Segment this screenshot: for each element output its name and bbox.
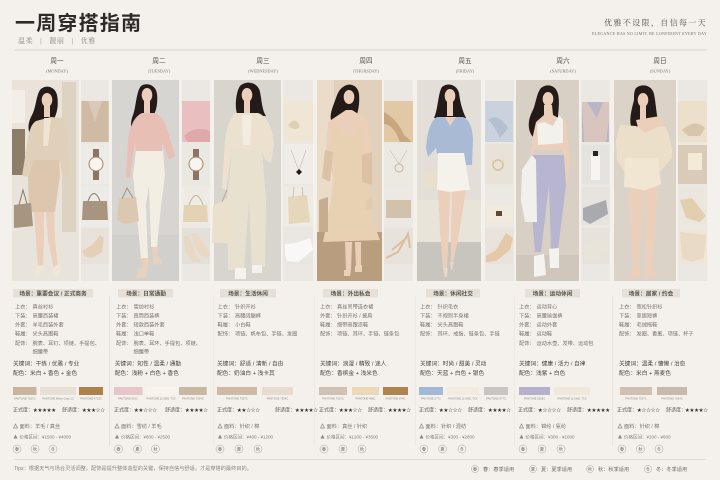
- ratings: 正式度：: [617, 406, 637, 414]
- season badges: [13, 445, 57, 453]
- outfit list: 外套：: [15, 320, 31, 328]
- outfit list: 真丝吊带连衣裙: [337, 302, 373, 310]
- weekday heading: [650, 57, 671, 74]
- outfit list: 配饰：: [218, 330, 233, 338]
- colour swatches: PANTONE 7534C: [182, 396, 204, 400]
- model photo: [212, 80, 281, 281]
- season badges: 秋: [256, 446, 261, 453]
- outfit list: 鞋履：: [420, 320, 436, 328]
- ratings: 舒适度：: [368, 406, 388, 414]
- outfit list: 真丝衬衫: [32, 302, 53, 310]
- season badges: 春: [15, 446, 20, 453]
- model photo: [317, 80, 382, 281]
- colour swatches: PANTONE 7534C: [267, 396, 288, 400]
- outfit list: 外套：: [320, 312, 336, 320]
- weekday heading: (WEDNESDAY): [248, 68, 278, 74]
- weekday heading: 周五: [458, 57, 472, 65]
- keywords and colour scheme: [13, 360, 80, 377]
- outfit list: 下装：: [116, 312, 132, 320]
- outfit list: 外套：: [519, 320, 535, 328]
- outfit list: [420, 302, 501, 338]
- fabric and price: 价格区间：¥400 - ¥1200: [224, 434, 274, 440]
- keywords and colour scheme: 关键词：舒适 / 清新 / 自由: [217, 360, 284, 368]
- ratings: ★★☆☆☆: [439, 406, 462, 414]
- model photo: [12, 80, 79, 281]
- colour swatches: PANTONE 7527C: [625, 396, 647, 400]
- colour swatches: PANTONE 877C: [486, 396, 506, 400]
- outfit list: 细带高跟凉鞋: [337, 320, 368, 328]
- ratings: ★☆☆☆☆: [538, 406, 561, 414]
- keywords and colour scheme: 配色：天蓝 + 白色 + 银色: [420, 369, 484, 377]
- outfit list: 下装：: [15, 312, 31, 320]
- outfit list: 上衣：: [420, 302, 436, 310]
- outfit list: 鞋履：: [320, 320, 336, 328]
- outfit list: 短款西装外套: [134, 320, 165, 328]
- colour swatches: [13, 387, 103, 400]
- ratings: [319, 406, 411, 414]
- season legend: 冬: [646, 466, 650, 473]
- weekday heading: 周二: [152, 57, 166, 65]
- season legend: 秋: [588, 466, 593, 473]
- fabric and price: 价格区间：¥300 - ¥1000: [526, 434, 575, 440]
- outfit list: 小白鞋: [235, 320, 251, 328]
- keywords and colour scheme: [115, 360, 181, 377]
- outfit list: 家居短裤: [636, 312, 657, 320]
- colour swatches: [114, 387, 207, 400]
- season badges: [320, 445, 366, 453]
- outfit list: 浅口单鞋: [134, 330, 154, 338]
- outfit list: 上衣：: [218, 302, 233, 310]
- season legend: [471, 465, 687, 473]
- outfit list: [619, 302, 694, 338]
- outfit list: 上衣：: [15, 302, 31, 310]
- panel: Monday: [12, 57, 109, 453]
- colour swatches: PANTONE 4715C: [80, 396, 102, 400]
- outfit list: 下装：: [619, 312, 635, 320]
- outfit list: 下装：: [218, 312, 233, 320]
- season badges: 冬: [51, 446, 55, 453]
- outfit list: 腕表、耳钉、项链、手提包、: [32, 339, 100, 347]
- outfit list: 配饰：: [15, 339, 31, 347]
- outfit list: 下装：: [420, 312, 436, 320]
- colour swatches: [620, 387, 687, 400]
- weekday heading: [148, 57, 171, 74]
- colour swatches: PANTONE 691C: [118, 396, 138, 400]
- weekday heading: (TUESDAY): [148, 68, 171, 74]
- outfit list: 鞋履：: [116, 330, 132, 338]
- scene tag: 场景：居家 / 约会: [629, 290, 674, 298]
- panel: Sunday: [614, 57, 708, 453]
- season badges: 夏: [237, 447, 242, 452]
- fabric and price: 价格区间：¥1200 - ¥3500: [326, 434, 379, 440]
- colour swatches: PANTONE Warm Gray 1C: [42, 396, 74, 400]
- slogan: [592, 18, 707, 37]
- model photo: [112, 80, 179, 281]
- keywords and colour scheme: 关键词：健康 / 活力 / 自律: [519, 360, 586, 368]
- outfit list: 鞋履：: [218, 320, 233, 328]
- ratings: 舒适度：: [165, 406, 185, 414]
- season legend: 冬：冬季适用: [656, 465, 687, 473]
- footer tips: Tips：根据天气与场合灵活调整。配饰是提升整体造型的关键，保持自信与舒适，才是穿搭的最终目的。: [14, 464, 252, 472]
- ratings: 舒适度：: [275, 406, 295, 414]
- ratings: 正式度：: [114, 406, 134, 414]
- outfit list: [218, 302, 297, 338]
- outfit list: [15, 302, 100, 355]
- season badges: 秋: [559, 446, 564, 453]
- weekday heading: [353, 57, 379, 74]
- season badges: [618, 445, 663, 453]
- keywords and colour scheme: 关键词：干练 / 优雅 / 专业: [13, 360, 80, 368]
- keywords and colour scheme: 关键词：时尚 / 甜美 / 灵动: [420, 360, 487, 368]
- colour swatches: PANTONE 874C: [386, 396, 406, 400]
- outfit list: 细腰带: [32, 347, 48, 355]
- season badges: 秋: [360, 446, 365, 453]
- scene tag: [13, 289, 93, 298]
- ratings: 正式度：: [217, 406, 237, 414]
- outfit list: 高腰阔腿裤: [235, 312, 261, 320]
- season badges: 夏: [341, 447, 346, 452]
- outfit list: 高腰瑜伽裤: [536, 312, 562, 320]
- fabric and price: 价格区间：¥200 - ¥600: [624, 434, 671, 440]
- fabric and price: 面料：真丝 / 针织: [326, 422, 367, 430]
- outfit list: [320, 302, 399, 338]
- weekday heading: 周日: [653, 57, 667, 65]
- outfit list: 配饰：: [519, 339, 535, 347]
- season legend: 夏: [531, 467, 536, 472]
- season badges: [519, 445, 565, 453]
- colour swatches: PANTONE 7534C: [661, 396, 683, 400]
- ratings: ★★★★★: [33, 408, 56, 412]
- outfit list: 运动外套: [536, 320, 558, 328]
- ratings: ★★★★☆: [685, 406, 708, 414]
- fabric and price: [115, 422, 171, 440]
- weekday heading: (THURSDAY): [353, 68, 379, 74]
- scene tag: [220, 289, 276, 298]
- keywords and colour scheme: 关键词：知性 / 温柔 / 通勤: [115, 360, 181, 368]
- scene tag: [118, 289, 173, 298]
- season legend: 夏：夏季适用: [541, 465, 572, 473]
- keywords and colour scheme: 配色：浅粉 + 白色 + 香色: [115, 369, 179, 377]
- fabric and price: 面料：针织 / 棉: [624, 422, 659, 430]
- colour swatches: PANTONE 7527C: [226, 396, 248, 400]
- outfit list: 宽松针织衫: [636, 302, 662, 310]
- keywords and colour scheme: 配色：米白 + 香色 + 金色: [13, 369, 77, 377]
- fabric and price: [520, 422, 575, 440]
- season badges: 秋: [153, 446, 158, 453]
- fabric and price: 面料：针织 / 混纺: [426, 422, 466, 430]
- outfit list: 针织毛衣: [438, 302, 458, 310]
- scene tag: 场景：休闲社交: [433, 290, 473, 298]
- ratings: 正式度：: [518, 406, 538, 414]
- keywords and colour scheme: [619, 360, 686, 377]
- ratings: ★★★★☆: [488, 406, 511, 414]
- ratings: [13, 406, 105, 414]
- outfit list: 运动水壶、发带、运动包: [536, 339, 594, 347]
- ratings: ★★★★☆: [388, 406, 411, 414]
- weekday heading: [46, 57, 68, 74]
- ratings: [419, 406, 511, 414]
- colour swatches: PANTONE 11-0601 TCX: [557, 396, 587, 400]
- outfit list: 细腰带: [134, 347, 149, 355]
- scene tag: 场景：生活休闲: [228, 290, 268, 298]
- outfit list: 运动背心: [536, 302, 557, 310]
- detail thumbnails: jacket, watch, bag, heels: [81, 80, 109, 281]
- outfit list: 羊毛西装外套: [32, 320, 64, 328]
- scene tag: 场景：运动休闲: [533, 290, 573, 298]
- subtitle: 温柔 | 靓丽 | 优雅: [18, 36, 96, 45]
- scene tag: 场景：外出私会: [331, 290, 371, 298]
- ratings: 舒适度：: [62, 406, 82, 414]
- outfit list: 耳环、戒指、链条包、手链: [438, 330, 501, 338]
- season badges: [114, 445, 160, 453]
- detail thumbnails: top, bottle, mat, sneakers: [581, 80, 610, 281]
- outfit list: 配饰：: [420, 330, 436, 338]
- outfit list: 上衣：: [116, 302, 132, 310]
- panel: Saturday: [516, 56, 610, 453]
- scene tag: [525, 289, 580, 298]
- season badges: 秋: [638, 446, 643, 453]
- slogan: 优雅不设限，自信每一天: [604, 18, 707, 28]
- keywords and colour scheme: 配色：浅紫 + 白色: [519, 369, 566, 377]
- colour swatches: [519, 387, 590, 400]
- season badges: [420, 445, 466, 453]
- keywords and colour scheme: 配色：米白 + 燕麦色: [619, 369, 671, 377]
- model photo: [417, 80, 481, 281]
- fabric and price: [618, 422, 671, 440]
- fabric and price: 面料：锦纶 / 氨纶: [526, 422, 566, 430]
- season badges: [216, 445, 262, 453]
- ratings: 正式度：: [13, 406, 33, 414]
- outfit list: 配饰：: [619, 330, 635, 338]
- ratings: 正式度：: [419, 406, 439, 414]
- outfit list: 腕表、耳环、手提包、项链、: [134, 339, 201, 347]
- outfit list: [116, 302, 201, 355]
- panel: Wednesday: [212, 57, 318, 453]
- outfit list: 配饰：: [116, 339, 132, 347]
- season badges: 春: [521, 446, 526, 453]
- ratings: ★★★★☆: [295, 406, 318, 414]
- fabric and price: [218, 422, 274, 440]
- ratings: 舒适度：: [468, 406, 488, 414]
- weekday heading: [456, 57, 475, 74]
- season badges: 春: [620, 446, 625, 453]
- scene tag: [426, 289, 480, 298]
- season badges: 秋: [33, 446, 38, 453]
- keywords and colour scheme: 配色：香槟金 + 浅米色: [320, 369, 378, 377]
- fabric and price: 面料：羊毛 / 真丝: [20, 422, 60, 430]
- scene tag: [622, 289, 680, 298]
- weekday heading: (FRIDAY): [456, 68, 475, 74]
- weekday heading: (SATURDAY): [550, 68, 576, 74]
- fabric and price: 价格区间：¥300 - ¥2800: [426, 434, 475, 440]
- outfit list: 雪纺衬衫: [134, 302, 154, 310]
- fabric and price: [14, 422, 72, 440]
- keywords and colour scheme: 关键词：温柔 / 慵懒 / 治愈: [619, 360, 686, 368]
- ratings: [617, 406, 708, 414]
- colour swatches: PANTONE 5305C: [524, 396, 545, 400]
- outfit list: 不规则半身裙: [438, 312, 469, 320]
- ratings: ★☆☆☆☆: [637, 406, 660, 414]
- weekday heading: (SUNDAY): [650, 68, 671, 74]
- ratings: ★★★☆☆: [82, 406, 105, 414]
- outfit list: 针织开衫 / 披肩: [337, 312, 372, 320]
- slogan: ELEGANCE HAS NO LIMIT, BE CONFIDENT EVERY DAY: [592, 31, 707, 37]
- outfit list: 尖头高跟鞋: [438, 320, 463, 328]
- outfit list: 上衣：: [519, 302, 535, 310]
- detail thumbnails: knit, candle, slippers, shorts: [678, 80, 707, 281]
- fabric and price: 面料：雪纺 / 羊毛: [121, 422, 162, 430]
- ratings: ★★★★★: [587, 408, 610, 412]
- colour swatches: PANTONE 468C: [356, 396, 376, 400]
- outfit list: 发圈、香薰、项链、杯子: [636, 330, 694, 338]
- ratings: ★★★☆☆: [339, 406, 362, 414]
- ratings: 舒适度：: [567, 406, 587, 414]
- title: 一周穿搭指南: [15, 11, 142, 35]
- keywords and colour scheme: [217, 360, 284, 377]
- ratings: [217, 406, 318, 414]
- outfit list: 直筒西装裤: [134, 312, 159, 320]
- outfit list: [519, 302, 594, 347]
- season badges: 春: [116, 446, 121, 453]
- season badges: 春: [218, 446, 223, 453]
- ratings: [518, 406, 610, 414]
- season badges: 冬: [657, 446, 661, 453]
- detail thumbnails: satin, necklace, clutch, sandals: [384, 80, 413, 281]
- season legend: 秋：秋季适用: [598, 465, 629, 473]
- weekday heading: [550, 56, 576, 74]
- season badges: 春: [322, 446, 327, 453]
- colour swatches: PANTONE 7527C: [14, 396, 35, 400]
- outfit list: 毛绒拖鞋: [636, 320, 657, 328]
- colour swatches: [419, 387, 508, 400]
- season badges: 夏: [540, 447, 545, 452]
- season badges: 冬: [460, 446, 464, 453]
- outfit list: 项链、耳环、手链、链条包: [337, 330, 399, 338]
- model photo: [516, 80, 579, 281]
- colour swatches: PANTONE 11-0601 TCX: [448, 396, 478, 400]
- outfit list: 鞋履：: [519, 330, 535, 338]
- keywords and colour scheme: [320, 360, 387, 377]
- keywords and colour scheme: 配色：奶油白 + 浅卡其: [217, 369, 275, 377]
- season badges: 夏: [135, 447, 140, 452]
- outfit list: 外套：: [116, 320, 132, 328]
- scene tag: 场景：日常通勤: [126, 290, 166, 298]
- outfit list: 尖头高跟鞋: [32, 330, 58, 338]
- season badges: 夏: [440, 447, 445, 452]
- outfit list: 鞋履：: [15, 330, 31, 338]
- weekday heading: 周三: [256, 57, 270, 65]
- fabric and price: [320, 422, 379, 440]
- outfit list: 下装：: [519, 312, 535, 320]
- weekday heading: 周六: [556, 56, 570, 65]
- outfit list: 运动鞋: [536, 330, 552, 338]
- fabric and price: 面料：针织 / 棉: [224, 422, 259, 430]
- scene tag: [323, 289, 378, 298]
- outfit list: 上衣：: [320, 302, 336, 310]
- outfit list: 鞋履：: [619, 320, 635, 328]
- colour swatches: [217, 387, 293, 400]
- season badges: 春: [422, 446, 427, 453]
- weekday heading: 周四: [359, 57, 373, 65]
- weekday heading: [248, 57, 278, 74]
- fabric and price: [420, 422, 475, 440]
- panel: Tuesday: [112, 57, 210, 453]
- panel: Friday: [417, 57, 514, 453]
- ratings: ★★☆☆☆: [134, 406, 157, 414]
- keywords and colour scheme: [420, 360, 487, 377]
- fabric and price: 价格区间：¥1500 - ¥4000: [20, 434, 72, 440]
- outfit list: 高腰西装裙: [32, 312, 58, 320]
- ratings: ★★★★☆: [185, 406, 208, 414]
- scene tag: 场景：重要会议 / 正式商务: [19, 290, 87, 298]
- outfit list: 针织开衫: [235, 302, 256, 310]
- detail thumbnails: fabric, watch, bag, heels: [182, 80, 210, 281]
- outfit list: 上衣：: [619, 302, 635, 310]
- fabric and price: 价格区间：¥800 - ¥2500: [121, 434, 171, 440]
- colour swatches: PANTONE 7527C: [322, 396, 344, 400]
- model photo: [614, 80, 676, 281]
- ratings: 舒适度：: [666, 406, 686, 414]
- weekday heading: (MONDAY): [46, 68, 68, 74]
- ratings: [114, 406, 208, 414]
- keywords and colour scheme: 关键词：浪漫 / 精致 / 迷人: [320, 360, 387, 368]
- outfit list: 配饰：: [320, 330, 336, 338]
- colour swatches: [319, 387, 408, 400]
- colour swatches: PANTONE 277C: [421, 396, 441, 400]
- colour swatches: PANTONE 11-0601 TCX: [146, 396, 176, 400]
- season legend: 春：春季适用: [483, 465, 514, 473]
- ratings: 正式度：: [319, 406, 339, 414]
- weekday heading: 周一: [50, 57, 64, 65]
- season legend: 春: [473, 466, 478, 473]
- detail thumbnails: knit, necklace, tote, sneakers: [283, 80, 313, 281]
- panel: Thursday: [317, 57, 413, 453]
- detail thumbnails: knit, ring, bag, heels: [485, 80, 514, 281]
- keywords and colour scheme: [519, 360, 586, 377]
- outfit list: 项链、帆布包、手链、发圈: [235, 330, 297, 338]
- ratings: ★★☆☆☆: [237, 406, 260, 414]
